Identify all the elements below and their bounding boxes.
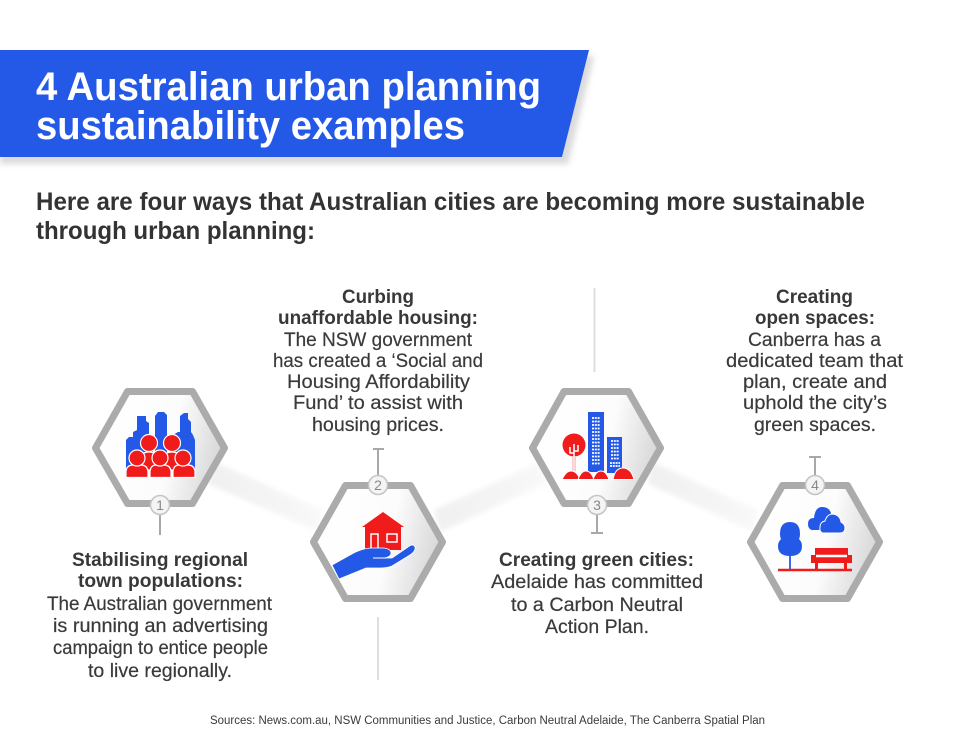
text: stabilising regional town populations: campaign to entice people	[53, 638, 268, 659]
text: creating open spaces: Creating	[776, 287, 853, 308]
hexagon 2	[314, 486, 442, 598]
title	[36, 65, 541, 148]
text: creating green cities: to a Carbon Neutral	[511, 595, 683, 616]
connector bands between hexagons	[208, 462, 758, 532]
text: stabilising regional town populations: is running an advertising	[53, 616, 268, 637]
number badge 1	[150, 496, 170, 514]
title: 4 Australian urban planning	[36, 65, 541, 109]
text: stabilising regional town populations	[47, 550, 273, 682]
text: creating green cities: Adelaide has committed	[491, 572, 703, 593]
stem 4	[809, 456, 821, 478]
text: curbing unaffordable housing: housing prices.	[312, 415, 444, 436]
text: creating green cities: Action Plan.	[545, 617, 649, 638]
title: sustainability examples	[36, 104, 465, 148]
number badge 4	[806, 476, 824, 494]
text: curbing unaffordable housing: Fund’ to assist with	[293, 393, 463, 414]
text: creating open spaces: dedicated team that	[726, 351, 904, 372]
text: creating green cities: Creating green cities:	[499, 550, 694, 571]
number badge 3: 3	[593, 497, 601, 513]
text: creating open spaces	[726, 287, 904, 436]
stem 1	[159, 514, 161, 535]
subtitle: through urban planning:	[36, 217, 315, 245]
text: creating open spaces: green spaces.	[754, 415, 876, 436]
subtitle: Here are four ways that Australian cities are becoming more sustainable	[36, 188, 865, 216]
text: stabilising regional town populations: Stabilising regional	[72, 550, 248, 571]
number badge 1: 1	[156, 497, 164, 513]
sources footer: Sources: News.com.au, NSW Communities and Justice, Carbon Neutral Adelaide, The Canberra Spatial Plan	[210, 715, 765, 727]
hexagon 3	[532, 392, 660, 504]
hexagon 4	[750, 486, 880, 598]
hexagon 1	[96, 392, 224, 504]
text: curbing unaffordable housing	[273, 287, 483, 436]
number badge 4: 4	[811, 477, 819, 493]
vertical guide top	[594, 288, 596, 372]
icon: house on hand	[332, 512, 415, 579]
number badge 3	[588, 496, 606, 514]
text: creating open spaces: plan, create and	[743, 372, 887, 393]
number badge 2	[368, 476, 388, 494]
panel: step 2 curbing unaffordable housing	[273, 287, 483, 598]
icon: green city	[562, 412, 634, 480]
text: creating open spaces: Canberra has a	[748, 330, 881, 351]
stem 3	[591, 514, 603, 533]
text: stabilising regional town populations: town populations:	[78, 571, 243, 592]
icon: park with tree, clouds and bench	[778, 507, 852, 570]
text: curbing unaffordable housing: unaffordable housing:	[278, 308, 478, 329]
panel: step 4 creating open spaces	[726, 287, 904, 598]
icon: city and people	[126, 412, 195, 478]
text: stabilising regional town populations: The Australian government	[47, 594, 273, 615]
text: stabilising regional town populations: to live regionally.	[88, 661, 232, 682]
title banner	[0, 50, 594, 164]
subtitle	[36, 188, 865, 245]
panel: step 1 stabilising regional towns	[47, 392, 273, 682]
text: curbing unaffordable housing: Housing Affordability	[287, 372, 471, 393]
vertical guide bottom	[377, 617, 379, 680]
text: creating open spaces: uphold the city’s	[743, 393, 887, 414]
text: curbing unaffordable housing: Curbing	[342, 287, 414, 308]
text: curbing unaffordable housing: The NSW government	[284, 330, 473, 351]
panel: step 3 creating green cities	[491, 392, 703, 638]
text: curbing unaffordable housing: has created a ‘Social and	[273, 351, 483, 372]
text: creating open spaces: open spaces:	[755, 308, 875, 329]
stem 2	[373, 448, 384, 476]
number badge 2: 2	[374, 477, 382, 493]
text: creating green cities	[491, 550, 703, 638]
